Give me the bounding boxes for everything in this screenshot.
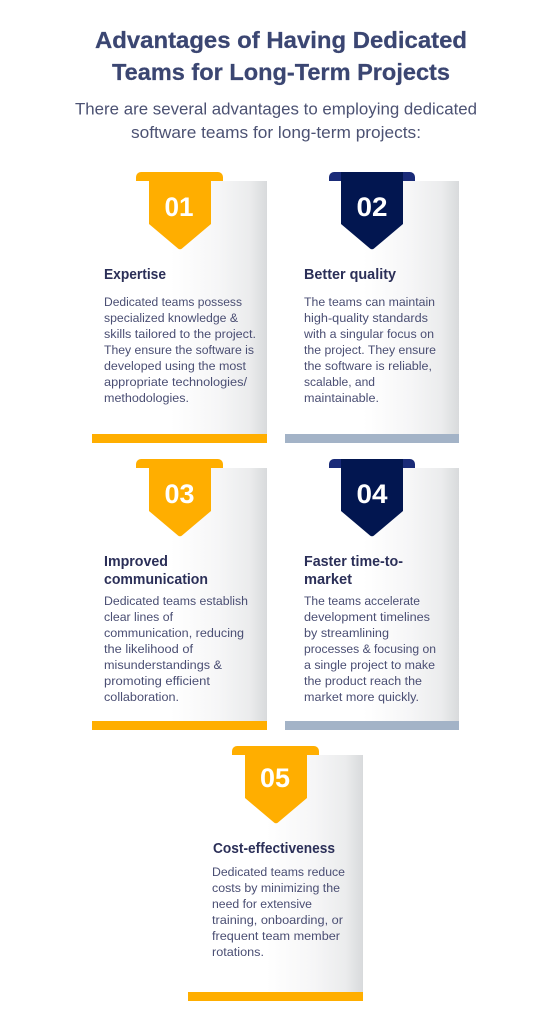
panel: 04 faster time-to-market — [285, 459, 459, 730]
heading: Improved — [104, 554, 168, 570]
body text: rotations. — [212, 945, 264, 959]
body text: Dedicated teams reduce — [212, 865, 345, 879]
badge: 02 — [329, 172, 415, 249]
body text: Dedicated teams establish — [104, 594, 248, 608]
body text: the likelihood of — [104, 642, 194, 656]
body text: developed using the most — [104, 359, 247, 373]
bottom bar — [285, 434, 459, 443]
body text: the product reach the — [304, 674, 422, 688]
heading: Faster time-to- — [304, 554, 403, 570]
body text — [104, 594, 248, 704]
title — [95, 27, 467, 85]
body text: communication, reducing — [104, 626, 244, 640]
subtitle: software teams for long-term projects: — [131, 123, 421, 142]
body text: need for extensive — [212, 897, 312, 911]
body text: by streamlining — [304, 626, 389, 640]
heading: Expertise — [104, 267, 166, 283]
body text: the project. They ensure — [304, 343, 436, 357]
body text: clear lines of — [104, 610, 174, 624]
heading — [304, 554, 403, 588]
badge: 02: 02 — [356, 192, 388, 222]
body text: maintainable. — [304, 391, 379, 405]
body text: appropriate technologies/ — [104, 375, 248, 389]
body text: They ensure the software is — [104, 343, 254, 357]
heading: market — [304, 572, 352, 588]
bottom bar — [285, 721, 459, 730]
body text: Dedicated teams possess — [104, 295, 242, 309]
body text: high-quality standards — [304, 311, 428, 325]
badge: 05 — [232, 746, 319, 823]
title: Advantages of Having Dedicated — [95, 27, 467, 53]
body text: promoting efficient — [104, 674, 211, 688]
subtitle: There are several advantages to employing dedicated — [75, 100, 477, 118]
heading: communication — [104, 572, 208, 588]
badge: 03: 03 — [164, 479, 194, 509]
body text: market more quickly. — [304, 690, 419, 704]
badge: 04 — [329, 459, 415, 536]
badge: 01: 01 — [164, 192, 194, 222]
body text: the software is reliable, — [304, 359, 432, 373]
body text: with a singular focus on — [303, 327, 434, 341]
subtitle — [75, 100, 477, 142]
body text: specialized knowledge & — [104, 311, 239, 325]
heading: Better quality — [304, 267, 396, 283]
badge: 05: 05 — [260, 763, 290, 793]
body text: training, onboarding, or — [212, 913, 343, 927]
body text — [212, 865, 345, 959]
body text: costs by minimizing the — [212, 881, 340, 895]
body text: skills tailored to the project. — [104, 327, 256, 341]
body text: a single project to make — [304, 658, 435, 672]
panel: 01 expertise — [92, 172, 267, 443]
panel: 05 cost-effectiveness — [188, 746, 363, 1001]
body text — [104, 295, 256, 405]
bottom bar — [188, 992, 363, 1001]
body text — [303, 295, 436, 405]
badge: 01 — [136, 172, 223, 249]
body text: scalable, and — [304, 375, 375, 389]
badge: 03 — [136, 459, 223, 536]
bottom bar — [92, 434, 267, 443]
panel: 03 improved communication — [92, 459, 267, 730]
bottom bar — [92, 721, 267, 730]
body text: development timelines — [304, 610, 430, 624]
body text: processes & focusing on — [304, 642, 436, 656]
badge: 04: 04 — [356, 479, 388, 509]
body text: misunderstandings & — [104, 658, 223, 672]
title: Teams for Long-Term Projects — [112, 59, 450, 85]
heading: Cost-effectiveness — [213, 841, 335, 857]
body text: The teams can maintain — [304, 295, 435, 309]
body text: methodologies. — [104, 391, 189, 405]
body text — [304, 594, 436, 704]
body text: frequent team member — [212, 929, 340, 943]
panel: 02 better quality — [285, 172, 459, 443]
body text: The teams accelerate — [304, 594, 420, 608]
heading — [104, 554, 208, 588]
body text: collaboration. — [104, 690, 179, 704]
